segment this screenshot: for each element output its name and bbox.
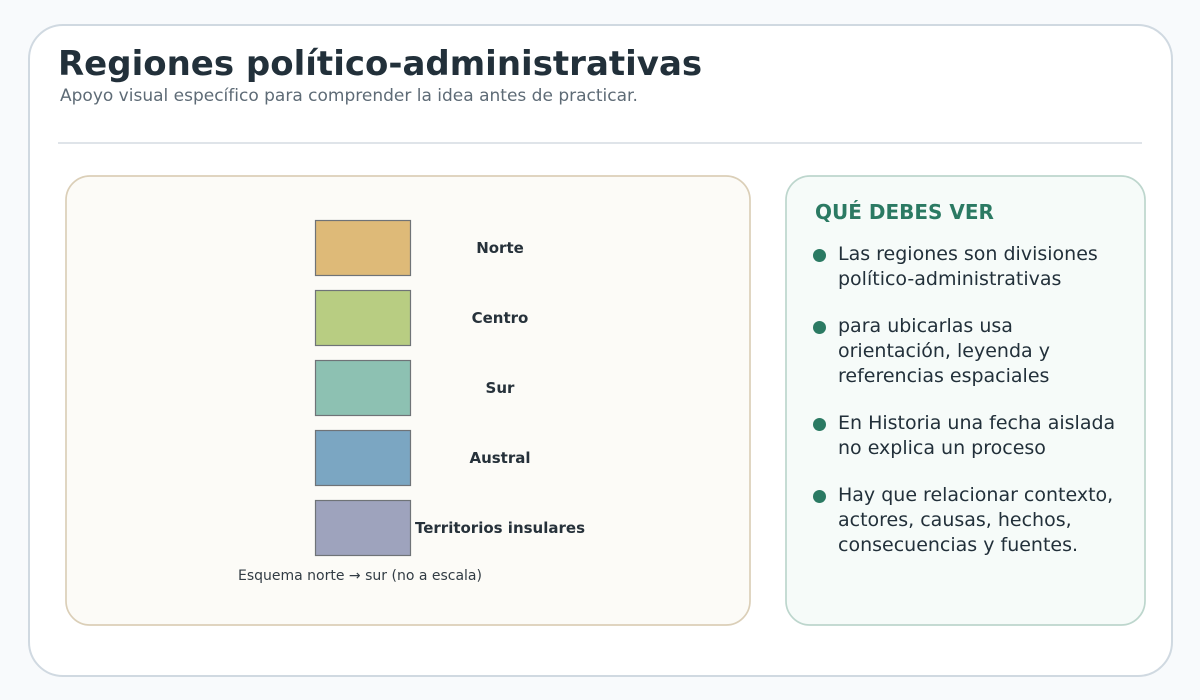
panel: region diagram (66, 176, 750, 625)
region: Norte: Norte (476, 239, 524, 257)
region: Sur (316, 360, 515, 416)
bullet 4 (813, 484, 1113, 556)
region: Territorios insulares (316, 500, 585, 556)
bullet 2 (813, 315, 1050, 387)
bullet 4: consecuencias y fuentes. (838, 534, 1078, 556)
region: Centro (316, 290, 528, 346)
region: Norte (316, 220, 524, 276)
bullet 2: orientación, leyenda y (838, 340, 1050, 362)
bullet 2: para ubicarlas usa (838, 315, 1013, 337)
panel: qué debes ver (786, 176, 1145, 625)
region: Centro: Centro (472, 309, 528, 327)
bullet 1 (813, 243, 1098, 290)
region: Territorios insulares: Territorios insulares (415, 519, 585, 537)
bullet 4: Hay que relacionar contexto, (838, 484, 1113, 506)
bullet 1: político-administrativas (838, 268, 1061, 290)
region: Austral: Austral (469, 449, 531, 467)
bullet 3: no explica un proceso (838, 437, 1046, 459)
region: Austral (316, 430, 531, 486)
bullet 2: referencias espaciales (838, 365, 1049, 387)
bullet 3 (813, 412, 1115, 459)
subtitle: Apoyo visual específico para comprender la idea antes de practicar. (60, 86, 638, 106)
diagram caption: Esquema norte → sur (no a escala) (238, 568, 482, 584)
bullet 3: En Historia una fecha aislada (838, 412, 1115, 434)
bullet 1: Las regiones son divisiones (838, 243, 1098, 265)
bullet 4: actores, causas, hechos, (838, 509, 1072, 531)
region: Sur: Sur (486, 379, 515, 397)
panel heading: QUÉ DEBES VER (815, 200, 994, 224)
title: Regiones político-administrativas (58, 44, 702, 84)
